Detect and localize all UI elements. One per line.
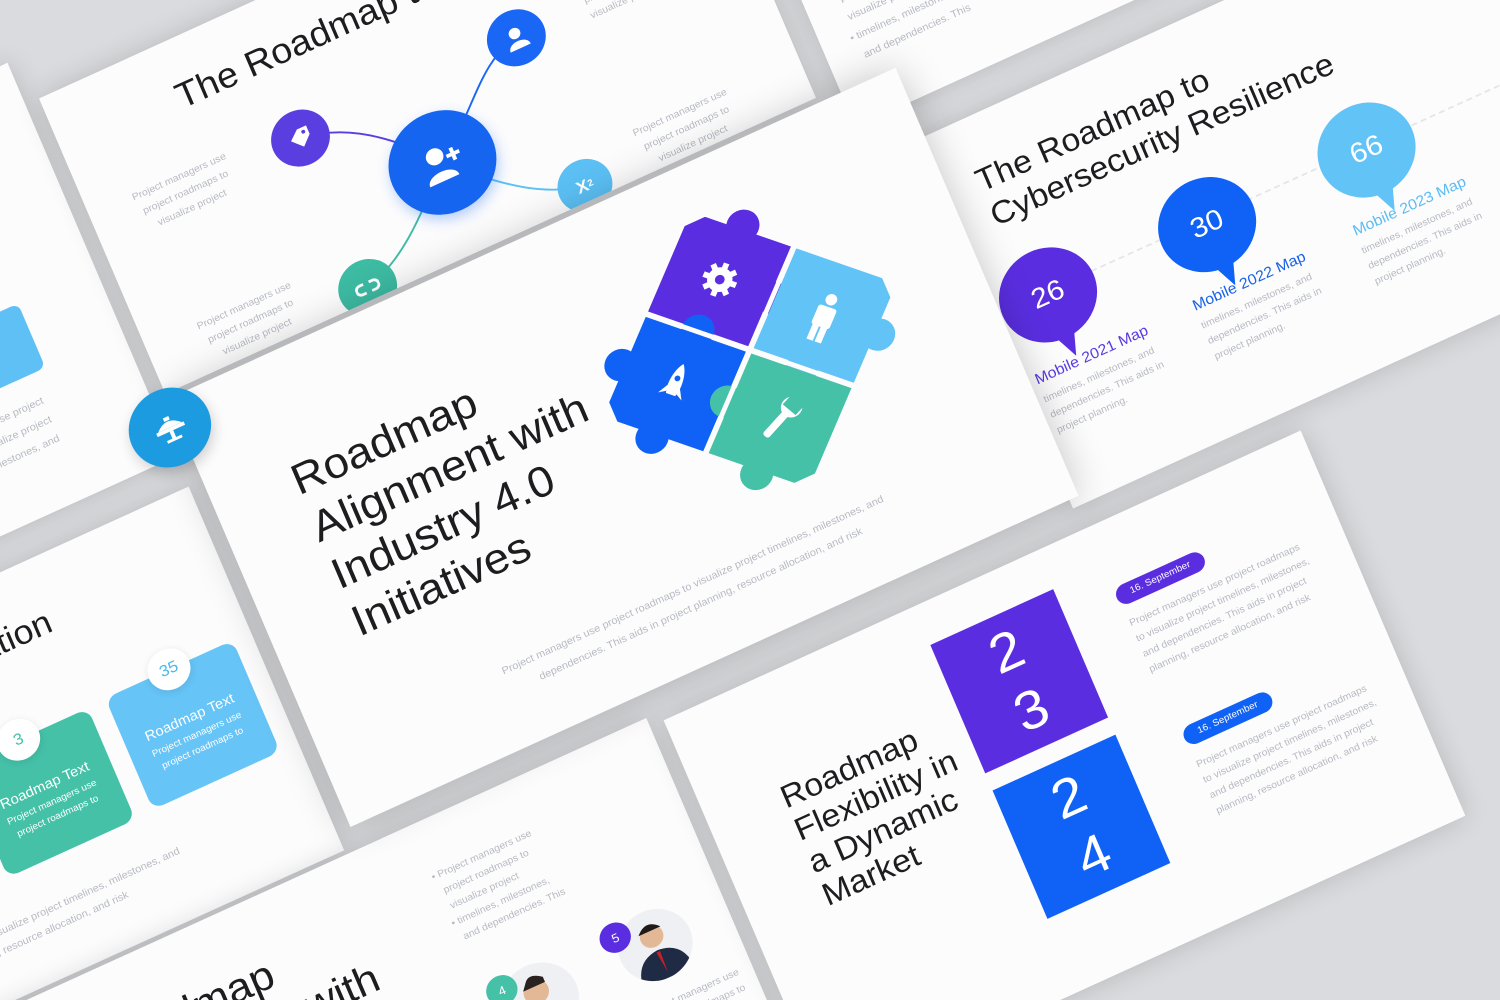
photo 1 [489,950,591,1000]
title: a Dynamic [803,782,963,881]
badge 3: 3 [11,729,26,749]
badge 5: 5 [609,930,621,946]
title: Industry 4.0 [324,454,562,598]
text block 1: to visualize project timelines, milestones, [1134,555,1311,644]
bubble 30 [1158,177,1256,286]
hub icon: add user [372,93,513,232]
bubble 66: 66 [1345,129,1388,171]
label 2023: timelines, milestones, and [1360,196,1474,256]
slide: Roadmap Flexibility in a Dynamic Market [664,431,1465,1000]
puzzle graphic [604,210,896,490]
icon: user [478,0,555,76]
light blue box [0,303,45,413]
text block 2: Project managers use project roadmaps [1195,683,1369,770]
label 2022: project planning. [1213,320,1287,362]
paragraph: dependencies. This aids in project planning, resource allocation, and risk [538,526,864,683]
title: Flexibility in [789,743,963,848]
icon: tag [262,100,339,176]
title: The Roadmap to [970,62,1215,199]
card: blue 35 [105,640,280,810]
slide: team photos (bottom) [0,718,815,1000]
bullet text: and dependencies. This [862,2,973,61]
label 2022: dependencies. This aids in [1206,285,1323,347]
bullets: project roadmaps to [442,847,531,896]
bullets: • Project managers use [430,828,533,883]
card: teal 3 [0,708,135,878]
pill: blue date: 16. September [1196,699,1260,736]
puzzle: light blue person [746,248,915,408]
title: Roadmap [284,377,484,504]
icon: subscript: X [573,175,591,197]
title: Alignment with [304,383,595,551]
bubble 66 [1318,102,1416,211]
puzzle: purple gear [648,193,818,353]
label 2021: timelines, milestones, and [1042,345,1156,405]
badge 3 [0,712,47,768]
badge 5 [595,917,636,958]
card: blue 35: project roadmaps to [161,725,245,771]
icon: subscript: 2 [586,177,595,189]
text block C: Project managers use [195,280,293,332]
connector lines [330,58,558,268]
label 2021: project planning. [1055,394,1130,436]
bubble 26: 26 [1027,273,1069,316]
badge 4: 4 [496,982,508,998]
label 2023: dependencies. This aids in [1366,210,1484,272]
number box: 2 3: 3 [1005,675,1058,744]
bullets: visualize project [448,870,521,911]
icon: presentation circle [116,374,224,481]
label 2021: Mobile 2021 Map [1033,323,1151,388]
label 2023 [1351,174,1484,287]
dashed timeline [1082,0,1500,276]
text block 1 [1128,542,1312,675]
text block 1: planning, resource allocation, and risk [1148,592,1312,675]
label 2021 [1033,323,1166,436]
icon: link [329,249,406,326]
bullets: and dependencies. This [461,886,567,942]
text block 2: planning, resource allocation, and risk [1214,733,1379,816]
text block C: project roadmaps to [206,297,295,346]
text block A: visualize project [156,187,228,228]
photo 2 [607,897,704,993]
badge 4 [481,970,522,1000]
label 2022: Mobile 2022 Map [1190,249,1308,314]
label 2023: project planning. [1373,245,1448,287]
slide: upper-left partial [0,63,176,782]
icon: subscript [549,150,621,221]
text block 2: to visualize project timelines, milestones, [1201,697,1378,786]
text block C [195,280,295,357]
title: Initiatives [344,522,538,645]
card: blue 35: Project managers use [151,710,243,760]
title: Roadmap [775,722,923,816]
text block B: project roadmaps to [642,104,731,152]
title [284,377,595,645]
pill: blue date [1180,689,1276,747]
text block 1: and dependencies. This aids in project [1141,575,1308,660]
title [775,722,963,913]
pill: purple date [1113,549,1208,607]
text block [0,395,61,496]
text block A: Project managers use [130,151,228,203]
card: teal 3: project roadmaps to [16,793,100,839]
puzzle gaps [589,199,911,501]
slide: network roadmap [39,0,816,394]
slide: cybersecurity roadmap [916,0,1500,508]
bubble 30: 30 [1186,203,1228,245]
card: teal 3: Project managers use [6,778,98,828]
text block C: visualize project [221,316,293,357]
number box: 2 3: 2 [980,617,1033,686]
label 2022: timelines, milestones, and [1199,271,1314,331]
text block 2 [1195,683,1379,816]
title: Cybersecurity Resilience [985,46,1339,233]
puzzle: teal wrench [682,347,851,507]
text block B: visualize project [657,123,729,164]
text block A: project roadmaps to [141,168,230,217]
label 2022 [1190,249,1323,362]
text block 1: Project managers use project roadmaps [1128,542,1302,629]
number box: 2 4: 2 [1042,763,1095,832]
card: teal 3: Roadmap Text [0,758,92,813]
number box: 2 3 [930,589,1108,773]
badge 35: 35 [157,657,181,681]
bullets [430,828,567,942]
badge 35 [141,641,197,697]
slide: roadmap cards (left) [0,487,344,1000]
bubble 26 [999,247,1098,356]
text block A [130,151,230,228]
slide: top bullets partial [687,0,1500,127]
paragraph: Project managers use project roadmaps to visualize project timelines, milestones, and [500,494,885,677]
text block B: Project managers use [631,86,729,139]
number box: 2 4 [993,735,1170,919]
title: Market [817,838,925,913]
text block B [631,86,731,164]
card: blue 35: Roadmap Text [143,690,237,745]
number box: 2 4: 4 [1067,821,1120,890]
label 2023: Mobile 2023 Map [1351,174,1469,239]
text block 2: and dependencies. This aids in project [1208,717,1375,801]
bullets: • timelines, milestones, [450,875,551,929]
slide: Roadmap Alignment with Industry 4.0 (central) [168,68,1078,827]
puzzle: blue rocket [576,291,754,470]
pill: purple date: 16. September [1128,559,1192,596]
label 2021: dependencies. This aids in [1048,359,1166,421]
